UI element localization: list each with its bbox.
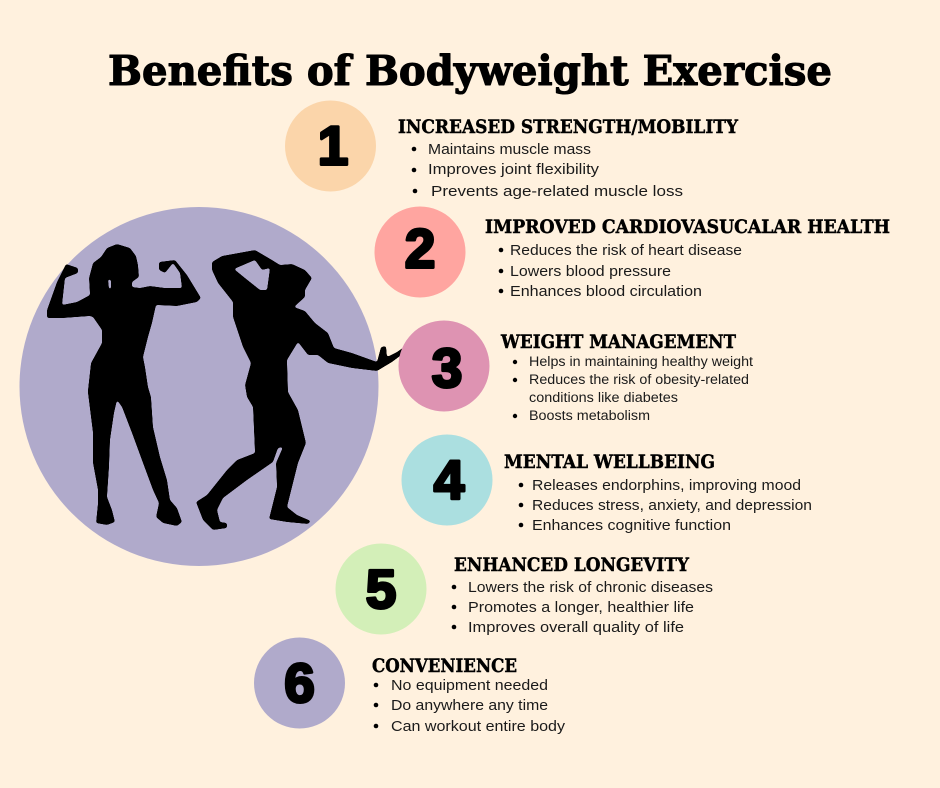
- bullet list 1: Maintains muscle mass: [428, 141, 591, 158]
- panel: benefit 1: [285, 100, 739, 200]
- heading 4: MENTAL WELLBEING: [504, 452, 715, 473]
- bullet list 5: [452, 579, 713, 636]
- bullet list 4: Releases endorphins, improving mood: [532, 477, 801, 494]
- panel: benefit 2: [374, 206, 890, 300]
- number badge 1: 1: [318, 114, 348, 176]
- panel: benefit 5: [336, 544, 713, 636]
- bullet list 2: Enhances blood circulation: [510, 283, 702, 300]
- bullet list 5: Promotes a longer, healthier life: [468, 599, 694, 616]
- number badge 4: 4: [434, 448, 465, 510]
- bullet list 2: [499, 242, 742, 300]
- bullet list 4: Reduces stress, anxiety, and depression: [532, 497, 812, 514]
- bullet list 5: Improves overall quality of life: [468, 619, 684, 636]
- background circle: [20, 207, 378, 566]
- panel: figure circle with silhouettes: [20, 207, 404, 566]
- bullet list 3: [513, 354, 753, 423]
- bullet list 1: [412, 141, 683, 200]
- bullet list 1: Prevents age-related muscle loss: [431, 183, 683, 200]
- number badge 3: 3: [432, 337, 462, 399]
- panel: benefit 3: [398, 320, 753, 423]
- number badge 6: [254, 638, 345, 728]
- heading 2: IMPROVED CARDIOVASUCALAR HEALTH: [485, 217, 890, 238]
- heading 6: CONVENIENCE: [372, 656, 517, 677]
- heading 1: INCREASED STRENGTH/MOBILITY: [398, 117, 739, 138]
- icon: male silhouette posing: [196, 250, 404, 530]
- title: Benefits of Bodyweight Exercise: [108, 47, 832, 95]
- bullet list 2: Reduces the risk of heart disease: [510, 242, 742, 259]
- number badge 3: [398, 320, 490, 412]
- heading 3: WEIGHT MANAGEMENT: [500, 332, 736, 353]
- number badge 6: 6: [284, 652, 315, 714]
- bullet list 6: No equipment needed: [391, 677, 548, 694]
- number badge 2: 2: [405, 218, 435, 280]
- bullet list 5: Lowers the risk of chronic diseases: [468, 579, 713, 596]
- bullet list 3: conditions like diabetes: [529, 390, 678, 405]
- bullet list 3: Boosts metabolism: [529, 408, 650, 423]
- number badge 1: [285, 100, 376, 192]
- bullet list 3: Helps in maintaining healthy weight: [529, 354, 753, 369]
- bullet list 6: Can workout entire body: [391, 718, 566, 735]
- icon: female silhouette flexing: [47, 244, 201, 526]
- heading 5: ENHANCED LONGEVITY: [454, 555, 690, 576]
- bullet list 6: Do anywhere any time: [391, 697, 548, 714]
- number badge 5: [336, 544, 426, 634]
- bullet list 4: [519, 477, 812, 534]
- panel: benefit 4: [402, 434, 812, 534]
- bullet list 4: Enhances cognitive function: [532, 517, 731, 534]
- bullet list 6: [374, 677, 566, 735]
- bullet list 1: Improves joint flexibility: [428, 161, 600, 178]
- number badge 5: 5: [366, 558, 396, 620]
- bullet list 3: Reduces the risk of obesity-related: [529, 372, 749, 387]
- number badge 2: [374, 206, 466, 298]
- panel: benefit 6: [254, 638, 566, 735]
- number badge 4: [402, 434, 492, 526]
- bullet list 2: Lowers blood pressure: [510, 263, 671, 280]
